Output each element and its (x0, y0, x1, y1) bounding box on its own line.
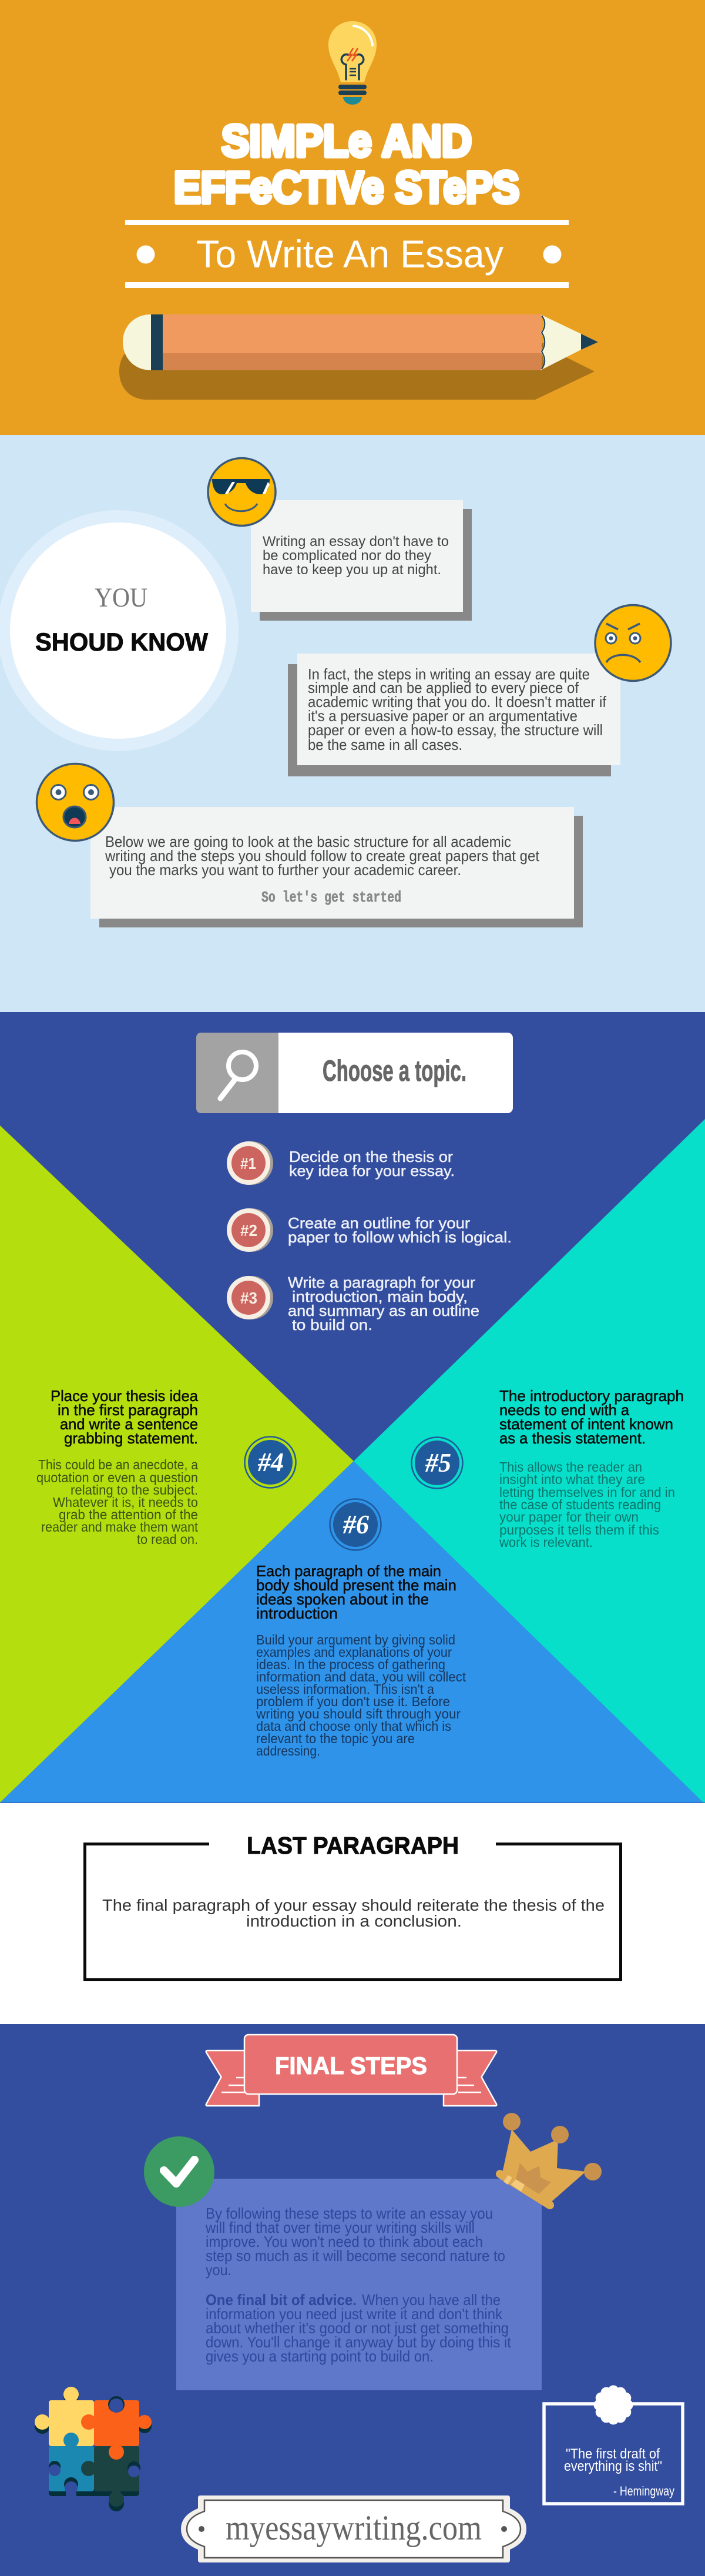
icon: sunglasses emoji (208, 458, 276, 525)
step 6 text block: relevant to the topic you are (256, 1731, 415, 1746)
step 5 text block: insight into what they are (499, 1472, 645, 1487)
circle badge: you shoud know: YOU (95, 582, 147, 613)
panel: closing advice: information you need just write it and don't think (206, 2305, 503, 2323)
step 6 text block: information and data, you will collect (256, 1669, 466, 1684)
card: intro two: academic writing that you do. It doesn't matter if (308, 693, 607, 711)
badge: 6 (330, 1499, 381, 1550)
step 1: key idea for your essay. (289, 1162, 455, 1180)
title: SIMPLe AND (221, 116, 472, 166)
panel: closing advice: improve. You won't need to think about each (206, 2233, 483, 2250)
step 4 text block: Place your thesis idea (51, 1387, 199, 1405)
panel: closing advice: gives you a starting point to build on. (206, 2347, 434, 2365)
card: intro two: be the same in all cases. (308, 736, 462, 753)
banner: final steps: FINAL STEPS (275, 2052, 427, 2079)
panel: closing advice: By following these steps to write an essay you (206, 2205, 493, 2222)
step 4 text block: grab the attention of the (59, 1507, 198, 1522)
step 6 text block: introduction (256, 1604, 338, 1622)
step 2: Create an outline for your (288, 1214, 470, 1232)
panel: closing advice (176, 2179, 542, 2390)
panel: steps diagram (0, 1012, 705, 1803)
step 4 text block: quotation or even a question (36, 1470, 198, 1485)
panel: you should know (0, 435, 705, 1012)
step 5 text block: as a thesis statement. (499, 1429, 646, 1447)
badge: 4 (244, 1436, 296, 1488)
icon: pencil (119, 314, 598, 400)
card: intro one (251, 500, 472, 621)
step 5 text block: the case of students reading (499, 1497, 661, 1512)
quote box: everything is shit" (564, 2458, 662, 2474)
step 3: #3 (240, 1289, 257, 1307)
panel: header (0, 0, 705, 435)
triangle: green (0, 1125, 354, 1803)
step 3: introduction, main body, (292, 1288, 468, 1305)
title (174, 116, 519, 213)
step 4 text block: to read on. (137, 1532, 198, 1547)
card: intro three (90, 807, 583, 927)
card: intro two: it's a persuasive paper or an argumentative (308, 707, 578, 725)
logo plaque: myessaywriting.com (226, 2508, 482, 2547)
step 5 text block: The introductory paragraph (499, 1387, 684, 1405)
step 5 text block: This allows the reader an (499, 1459, 642, 1475)
panel: closing advice: step so much as it will become second nature to (206, 2247, 505, 2265)
step 6 text block: data and choose only that which is (256, 1719, 451, 1734)
banner: final steps (206, 2035, 496, 2106)
step 6 text block: addressing. (256, 1743, 320, 1758)
triangle: blue (0, 1461, 703, 1803)
card: intro two: paper or even a how-to essay, the structure will (308, 721, 603, 739)
circle badge: you shoud know: SHOUD KNOW (35, 628, 208, 656)
step 3 (227, 1274, 479, 1334)
step 4 text block (36, 1387, 199, 1547)
icon: angry emoji (595, 605, 671, 681)
panel: closing advice: One final bit of advice. (206, 2291, 357, 2309)
step 5 text block: letting themselves in for and in (499, 1485, 675, 1500)
step 5 text block: your paper for their own (499, 1509, 639, 1525)
icon: puzzle (35, 2387, 152, 2511)
step 6 text block: problem if you don't use it. Before (256, 1694, 450, 1709)
text: last paragraph body (102, 1896, 605, 1930)
icon: crown (499, 2113, 602, 2206)
step 5 text block: purposes it tells them if this (499, 1522, 659, 1537)
step 1: #1 (240, 1154, 256, 1173)
step 3: to build on. (292, 1316, 372, 1334)
step 6 text block: writing you should sift through your (256, 1706, 461, 1721)
frame (85, 1844, 620, 1979)
step 6 text block: Build your argument by giving solid (256, 1632, 455, 1647)
step 6 text block: examples and explanations of your (256, 1644, 452, 1660)
badge: 6: #6 (343, 1509, 369, 1539)
panel: last paragraph (0, 1803, 705, 2024)
subtitle band: To Write An Essay (196, 232, 503, 276)
panel: closing advice: will find that over time your writing skills will (205, 2219, 475, 2236)
step 2: paper to follow which is logical. (288, 1228, 512, 1246)
step 3: and summary as an outline (288, 1302, 479, 1319)
step 4 text block: in the first paragraph (58, 1401, 198, 1419)
search bar: choose a topic: Choose a topic. (323, 1054, 466, 1087)
step 6 text block: useless information. This isn't a (256, 1681, 434, 1697)
text: last paragraph body: introduction in a conclusion. (246, 1912, 462, 1930)
card: intro three: you the marks you want to further your academic career. (109, 861, 461, 879)
step 2 (227, 1208, 512, 1252)
step 5 text block: work is relevant. (499, 1535, 593, 1550)
step 4 text block: reader and make them want (41, 1519, 199, 1535)
card: intro three: Below we are going to look at the basic structure for all academic (105, 833, 511, 850)
panel: closing advice: about whether it's good or not just get something (206, 2319, 509, 2337)
card: intro one: have to keep you up at night. (263, 562, 441, 578)
badge: 4: #4 (257, 1447, 284, 1477)
title: EFFeCTIVe STePS (174, 163, 519, 213)
card: intro two: simple and can be applied to every piece of (308, 679, 579, 696)
panel: closing advice: you. (206, 2261, 231, 2279)
step 1: Decide on the thesis or (289, 1148, 453, 1165)
step 6 text block: Each paragraph of the main (256, 1562, 441, 1580)
step 4 text block: This could be an anecdote, a (38, 1457, 198, 1472)
card: intro three: So let's get started (261, 889, 401, 906)
card: intro one: be complicated nor do they (263, 548, 432, 564)
card: intro two (288, 654, 620, 776)
step 3: Write a paragraph for your (288, 1274, 475, 1291)
panel: closing advice: down. You'll change it anyway but by doing this it (206, 2333, 512, 2351)
quote box: "The first draft of (566, 2446, 660, 2462)
step 2: #2 (240, 1221, 257, 1240)
card: intro three: writing and the steps you should follow to create great papers that get (105, 847, 540, 865)
step 4 text block: relating to the subject. (70, 1482, 198, 1498)
card: intro two: In fact, the steps in writing an essay are quite (308, 665, 590, 683)
step 4 text block: Whatever it is, it needs to (53, 1495, 198, 1510)
icon: light bulb (328, 21, 377, 105)
card: intro one: Writing an essay don't have to (263, 534, 449, 550)
step 6 text block: body should present the main (256, 1576, 456, 1594)
panel: closing advice: When you have all the (362, 2291, 501, 2309)
step 4 text block: grabbing statement. (64, 1429, 198, 1447)
step 5 text block: needs to end with a (499, 1401, 630, 1419)
heading: last paragraph: LAST PARAGRAPH (247, 1832, 459, 1859)
step 6 text block: ideas. In the process of gathering (256, 1657, 445, 1672)
text: last paragraph body: The final paragraph of your essay should reiterate the thesis of the (102, 1896, 605, 1914)
triangle: teal (354, 1119, 705, 1803)
quote box (544, 2385, 683, 2504)
step 6 text block: ideas spoken about in the (256, 1590, 429, 1608)
search bar: choose a topic (196, 1033, 513, 1113)
panel: final steps (0, 2024, 705, 2576)
step 5 text block: statement of intent known (499, 1415, 673, 1433)
quote box: - Hemingway (613, 2484, 674, 2498)
circle badge: you shoud know (0, 510, 239, 751)
step 5 text block (499, 1387, 684, 1550)
step 1 (227, 1141, 455, 1185)
icon: shocked emoji (36, 764, 114, 840)
badge: 5 (411, 1438, 463, 1488)
icon: check badge (144, 2136, 214, 2207)
step 6 text block (256, 1562, 466, 1758)
step 4 text block: and write a sentence (60, 1415, 198, 1433)
subtitle band (125, 220, 569, 288)
logo plaque (181, 2495, 526, 2562)
badge: 5: #5 (425, 1448, 451, 1478)
